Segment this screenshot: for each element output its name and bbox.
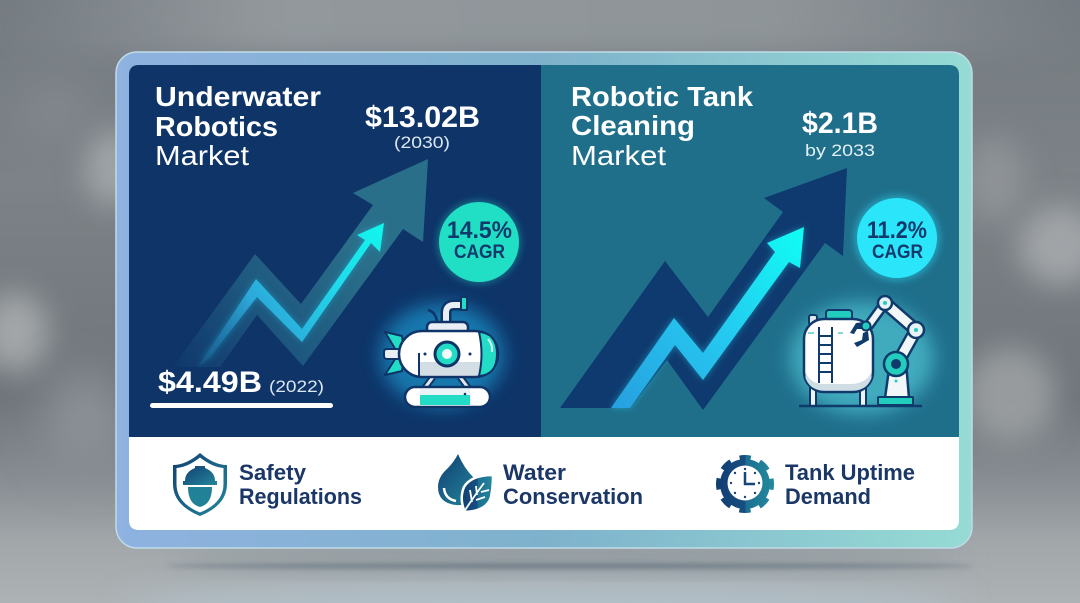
icon: tank with robotic arm [790,296,934,414]
heading: underwater robotics market: Market [155,140,249,171]
value: 2.1B by 2033: by 2033 [805,141,875,160]
value: 2.1B by 2033: $2.1B [802,107,878,140]
heading: robotic tank cleaning market: Robotic Tank [571,81,753,112]
heading: underwater robotics market [155,81,321,171]
label: water conservation [503,460,643,509]
label: water conservation: Water [503,460,566,485]
panel: robotic tank cleaning market [541,65,959,437]
glass card frame [116,52,972,548]
value: 13.02B in 2030: $13.02B [365,101,480,134]
label: safety regulations: Regulations [239,484,362,509]
label: safety regulations [239,460,362,509]
value: 4.49B in 2022: $4.49B [158,366,262,399]
panel: demand drivers bar [129,437,959,530]
icon: gear with clock [719,458,771,510]
label: water conservation: Conservation [503,484,643,509]
label: safety regulations: Safety [239,460,307,485]
badge: 14.5 percent CAGR [437,200,521,284]
value: 13.02B in 2030: (2030) [394,133,450,152]
value: 2.1B by 2033 [802,107,878,160]
driver: tank uptime demand [719,458,915,510]
heading: robotic tank cleaning market: Market [571,140,666,171]
heading: robotic tank cleaning market: Cleaning [571,110,695,141]
value: 4.49B in 2022 [150,366,333,408]
badge: 14.5 percent CAGR: 14.5% [447,217,512,244]
chart arrow: underwater robotics growth [173,159,428,367]
label: tank uptime demand [785,460,915,509]
badge: 11.2 percent CAGR [854,195,940,281]
icon: submarine [380,297,504,407]
driver: water conservation [438,454,643,515]
heading: robotic tank cleaning market [571,81,753,171]
badge: 11.2 percent CAGR: CAGR [872,242,923,263]
heading: underwater robotics market: Underwater [155,81,321,112]
panel: underwater robotics market [129,65,541,437]
heading: underwater robotics market: Robotics [155,111,278,142]
icon: water drop with leaf [438,454,493,515]
value: 13.02B in 2030 [365,101,480,152]
badge: 11.2 percent CAGR: 11.2% [867,217,927,244]
chart arrow: robotic tank cleaning growth [560,168,847,410]
label: tank uptime demand: Tank Uptime [785,460,915,485]
driver: safety regulations [173,453,362,516]
value: 4.49B in 2022: (2022) [269,377,324,396]
label: tank uptime demand: Demand [785,484,871,509]
icon: shield with hard hat [173,453,227,516]
badge: 14.5 percent CAGR: CAGR [454,242,505,263]
